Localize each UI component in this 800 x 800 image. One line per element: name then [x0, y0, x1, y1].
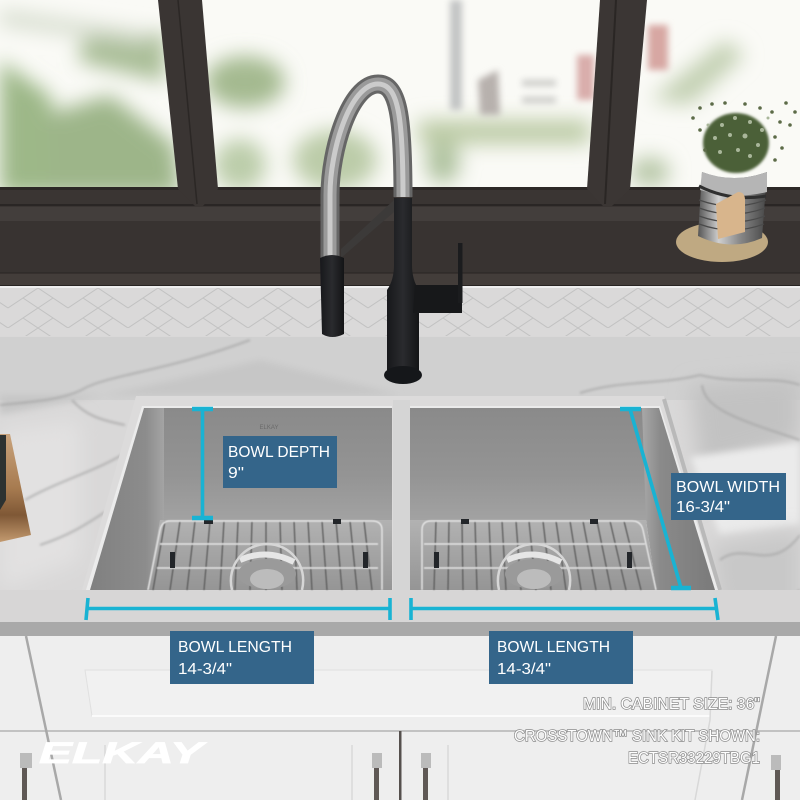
- sink kit note: [514, 728, 760, 767]
- right rack: [422, 521, 656, 590]
- rack clips: [170, 519, 632, 568]
- label: bowl depth: 9": [228, 465, 244, 482]
- minimum cabinet size note: MIN. CABINET SIZE: 36": [583, 696, 760, 713]
- cabinet handles: [20, 753, 781, 800]
- cabinets: [0, 622, 800, 800]
- faucet lever: [458, 243, 462, 303]
- left rack: [148, 521, 382, 590]
- right bowl length line: [411, 598, 718, 620]
- Elkay logo: ELKAY: [39, 737, 208, 770]
- backsplash tile: [0, 288, 800, 337]
- sink kit note: ECTSR33229TBG1: [628, 750, 760, 767]
- left bowl: [86, 406, 392, 590]
- can ribs: [699, 200, 766, 230]
- bowl width measure line: [620, 409, 691, 588]
- faucet spout hose: [330, 84, 403, 258]
- coaster: [676, 222, 768, 262]
- right bowl: [410, 406, 718, 590]
- center divider: [393, 400, 410, 592]
- left drain: [231, 544, 303, 590]
- foliage: [691, 101, 797, 173]
- hose mid tone: [330, 84, 403, 258]
- window sill: [0, 187, 800, 286]
- label: right bowl length: [489, 631, 633, 684]
- can band: [699, 186, 766, 198]
- left bowl length line: [86, 598, 390, 620]
- front counter strip: [0, 590, 800, 622]
- can: [698, 172, 767, 245]
- hose highlight: [330, 84, 403, 258]
- sink rim: [82, 396, 720, 590]
- right drain: [498, 544, 570, 590]
- faucet sprayer: [320, 255, 344, 337]
- faucet: [320, 84, 462, 384]
- window view background: [0, 0, 800, 195]
- faucet base: [384, 366, 422, 384]
- outer right rim edge: [664, 399, 720, 590]
- label: right bowl length: 14-3/4": [497, 661, 551, 678]
- cutting board at left edge: [0, 434, 31, 542]
- label: left bowl length: 14-3/4": [178, 661, 232, 678]
- sink kit note: CROSSTOWN™ SINK KIT SHOWN:: [514, 728, 760, 745]
- bowl depth measure line: [192, 409, 213, 518]
- label: left bowl length: BOWL LENGTH: [178, 639, 292, 656]
- can top rim: [700, 172, 767, 196]
- label: bowl width: [671, 473, 786, 520]
- sink: [0, 396, 800, 622]
- window frames: [158, 0, 647, 206]
- potted thyme: [676, 101, 797, 262]
- sink brand mark: ELKAY: [260, 425, 278, 431]
- label: right bowl length: BOWL LENGTH: [497, 639, 610, 656]
- faucet arm: [341, 200, 394, 258]
- marble countertop: [0, 336, 800, 626]
- label: left bowl length: [170, 631, 314, 684]
- label: bowl depth: [223, 436, 337, 488]
- faucet handle: [413, 285, 462, 313]
- label: bowl width: 16-3/4": [676, 499, 730, 516]
- label: bowl depth: BOWL DEPTH: [228, 444, 330, 461]
- faucet body: [387, 198, 419, 370]
- tag: [716, 192, 745, 239]
- label: bowl width: BOWL WIDTH: [676, 479, 780, 496]
